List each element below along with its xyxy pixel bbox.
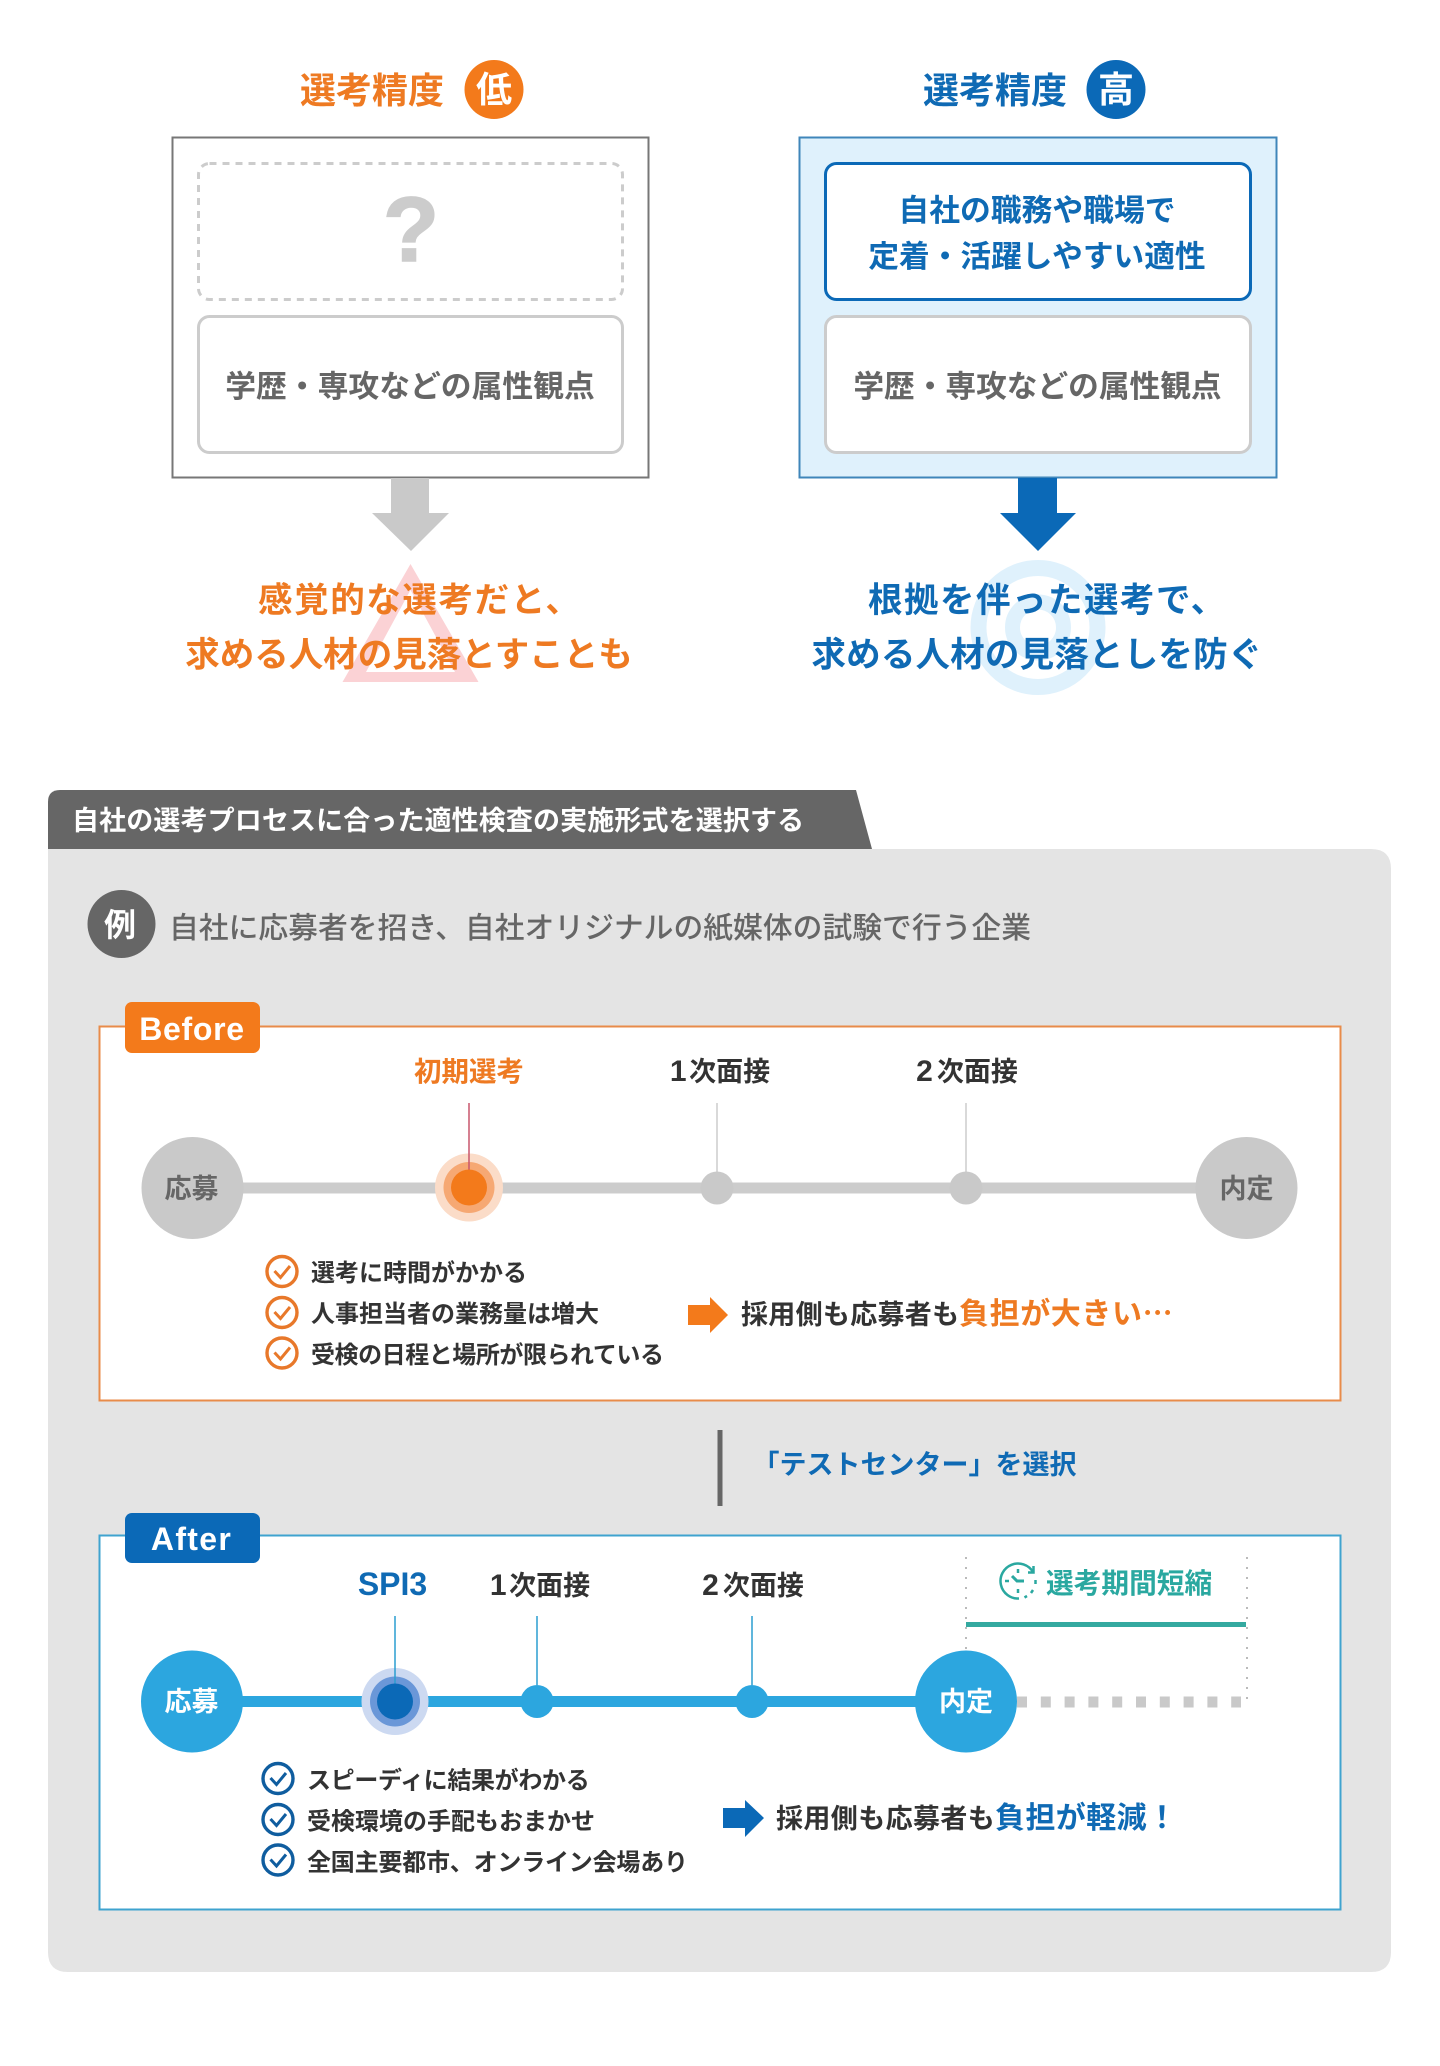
fit criterion box (826, 164, 1250, 300)
panel: test format example (48, 790, 1391, 1972)
fit criterion box: 定着・活躍しやすい適性 (868, 239, 1206, 274)
timeline: before (142, 1055, 1298, 1239)
result text: before: 負担が大きい… (959, 1289, 1173, 1333)
start node: 応募 (164, 1174, 218, 1204)
panel: high selection accuracy (800, 60, 1276, 687)
second interview node: 2次面接 (916, 1055, 1018, 1088)
conclusion text: high accuracy: 根拠を伴った選考で、 (868, 582, 1227, 620)
after tag: After (151, 1521, 232, 1557)
result text: after: 負担が軽減！ (995, 1793, 1177, 1837)
heading: high accuracy: 高 (1098, 69, 1134, 110)
panel: after (100, 1513, 1340, 1910)
attribute criterion box (198, 316, 622, 452)
offer node: 内定 (939, 1687, 993, 1717)
box: high accuracy criteria (800, 138, 1276, 478)
second interview node (702, 1569, 804, 1718)
offer node: 内定 (1220, 1174, 1274, 1204)
conclusion text: low accuracy: 求める人材の見落とすことも (185, 636, 633, 674)
attribute criterion box (826, 316, 1250, 452)
icon: pink triangle (342, 564, 478, 682)
arrow: blue down (1000, 478, 1076, 551)
offer node (1196, 1137, 1298, 1239)
before tag: Before (139, 1011, 245, 1047)
second interview node (916, 1055, 1018, 1204)
heading: low accuracy: 低 (476, 69, 512, 110)
unknown criterion box: ? (383, 179, 439, 281)
timeline: after (141, 1566, 1017, 1752)
check item: 人事担当者の業務量は増大 (311, 1301, 599, 1328)
heading: low accuracy: 選考精度 (300, 70, 444, 111)
label: test center selection: 「テストセンター」を選択 (752, 1450, 1076, 1480)
removed steps dotted line (1017, 1696, 1241, 1708)
icon: double circle (978, 568, 1098, 687)
second interview node: 2次面接 (702, 1569, 804, 1602)
shortened period marker: 選考期間短縮 (1046, 1568, 1212, 1599)
result text: after: 採用側も応募者も (776, 1804, 995, 1834)
shortened period marker (966, 1557, 1247, 1702)
conclusion text: low accuracy: 感覚的な選考だと、 (258, 582, 582, 620)
conclusion text: high accuracy (811, 582, 1263, 674)
before tag (125, 1002, 260, 1053)
example line: 例 (104, 907, 136, 943)
start node (142, 1137, 244, 1239)
section header tab (48, 790, 872, 849)
section header tab: 自社の選考プロセスに合った適性検査の実施形式を選択する (72, 806, 804, 836)
heading: low accuracy (300, 60, 524, 119)
result text: after (776, 1793, 1177, 1837)
arrow: gray down (372, 478, 449, 551)
offer node (915, 1650, 1017, 1752)
heading: high accuracy: 選考精度 (923, 70, 1067, 111)
check item: 受検環境の手配もおまかせ (307, 1808, 595, 1836)
arrow: blue right (723, 1800, 764, 1837)
after tag (125, 1513, 260, 1563)
SPI3 node: SPI3 (358, 1566, 427, 1602)
first interview node: 1次面接 (490, 1569, 590, 1602)
check item: 選考に時間がかかる (311, 1259, 527, 1287)
box: low accuracy criteria (172, 138, 648, 478)
start node (141, 1650, 243, 1752)
panel: before (100, 1002, 1340, 1400)
attribute criterion box: 学歴・専攻などの属性観点 (853, 369, 1222, 404)
first interview node (670, 1055, 770, 1204)
divider bar (718, 1430, 722, 1506)
heading: high accuracy (923, 60, 1146, 119)
first interview node (490, 1569, 590, 1718)
checklist: before (267, 1256, 664, 1369)
conclusion text: low accuracy (185, 582, 633, 674)
example line (88, 890, 1031, 958)
check item: 受検の日程と場所が限られている (311, 1341, 664, 1369)
conclusion text: high accuracy: 求める人材の見落としを防ぐ (811, 636, 1263, 674)
checklist: after (263, 1764, 688, 1876)
initial screening node: 初期選考 (414, 1056, 524, 1087)
example line: 自社に応募者を招き、自社オリジナルの紙媒体の試験で行う企業 (169, 912, 1031, 945)
start node: 応募 (164, 1687, 218, 1717)
result text: before (741, 1289, 1173, 1333)
attribute criterion box: 学歴・専攻などの属性観点 (225, 369, 595, 404)
initial screening node (414, 1056, 524, 1222)
fit criterion box: 自社の職務や職場で (898, 193, 1176, 228)
result text: before: 採用側も応募者も (741, 1300, 959, 1330)
icon: clock (1001, 1564, 1036, 1599)
check item: 全国主要都市、オンライン会場あり (307, 1850, 688, 1876)
check item: スピーディに結果がわかる (307, 1766, 589, 1794)
panel: low selection accuracy (172, 60, 648, 682)
unknown criterion box (198, 164, 622, 300)
arrow: orange right (688, 1297, 728, 1333)
SPI3 node (358, 1566, 428, 1735)
first interview node: 1次面接 (670, 1055, 770, 1088)
